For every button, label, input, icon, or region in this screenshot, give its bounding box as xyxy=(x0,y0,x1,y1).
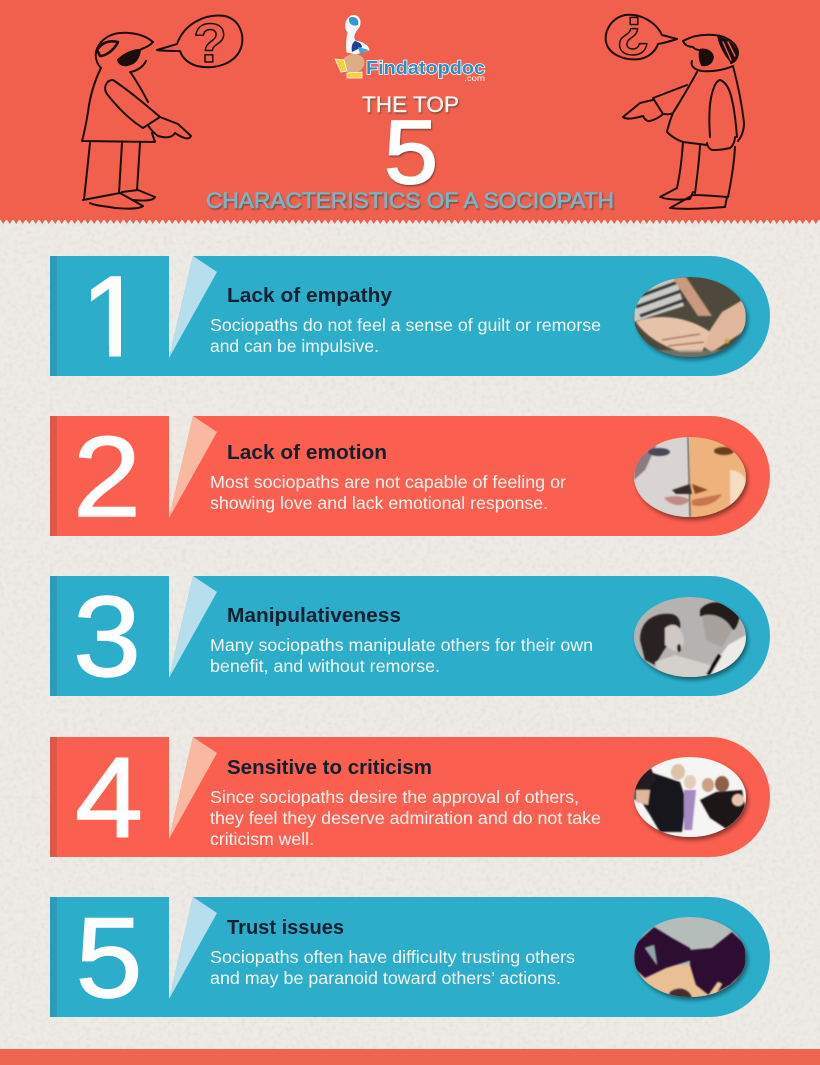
band shape xyxy=(50,737,770,857)
photo: group of people xyxy=(630,755,750,840)
logo wordmark: Findatopdoc xyxy=(366,58,485,78)
body text: showing love and lack emotional response. xyxy=(210,493,548,513)
body text: Sociopaths often have difficulty trusting others xyxy=(210,947,575,967)
band shape xyxy=(50,416,770,536)
body text xyxy=(210,947,575,988)
icon: duck mascot xyxy=(335,16,369,78)
illustration: right man with inverted question bubble xyxy=(606,0,744,209)
header banner xyxy=(0,0,820,224)
heading: Lack of emotion xyxy=(227,441,387,464)
heading: Sensitive to criticism xyxy=(227,756,432,779)
heading: Lack of empathy xyxy=(227,284,393,307)
title: characteristics: CHARACTERISTICS OF A SOCIOPATH xyxy=(206,188,614,213)
body text: Since sociopaths desire the approval of others, xyxy=(210,787,579,807)
body text: benefit, and without remorse. xyxy=(210,656,440,676)
panel: 2 lack of emotion xyxy=(50,414,770,541)
logo .com: .com xyxy=(464,74,485,83)
panel: 1 lack of empathy xyxy=(50,254,770,381)
band shape xyxy=(50,897,770,1017)
illustration: left man with question bubble xyxy=(82,12,242,209)
body text: they feel they deserve admiration and do not take xyxy=(210,808,601,828)
band shape xyxy=(50,576,770,696)
body text: Many sociopaths manipulate others for their own xyxy=(210,635,593,655)
body text xyxy=(210,787,601,849)
body text: Most sociopaths are not capable of feeling or xyxy=(210,472,566,492)
photo: hands xyxy=(630,275,750,360)
number 4: 4 xyxy=(75,735,143,862)
panel: 4 sensitive to criticism xyxy=(50,735,770,862)
number 5: 5 xyxy=(76,895,142,1022)
heading: Trust issues xyxy=(227,916,344,939)
panel: 5 trust issues xyxy=(50,895,770,1022)
body text xyxy=(210,635,593,676)
photo: arguing couple xyxy=(630,595,750,680)
number 2: 2 xyxy=(73,414,141,541)
heading: Manipulativeness xyxy=(227,604,401,627)
illustration: left man with question bubble: ? xyxy=(193,12,227,74)
body text xyxy=(210,315,601,356)
body text: criticism well. xyxy=(210,829,314,849)
body text: and may be paranoid toward others’ actions. xyxy=(210,968,561,988)
logo xyxy=(335,16,485,83)
title xyxy=(206,92,614,213)
body text xyxy=(210,472,566,513)
panel: 3 manipulativeness xyxy=(50,574,770,701)
title: big 5: 5 xyxy=(384,103,438,203)
footer bar xyxy=(0,1049,820,1065)
number 1 xyxy=(91,276,121,356)
photo: linked hands xyxy=(630,915,750,1000)
body text: and can be impulsive. xyxy=(210,336,379,356)
title: the top: THE TOP xyxy=(362,92,459,117)
number 3: 3 xyxy=(73,574,141,701)
number 1: 1 xyxy=(81,254,145,381)
photo: split face xyxy=(630,435,750,520)
band shape xyxy=(50,256,770,376)
body text: Sociopaths do not feel a sense of guilt or remorse xyxy=(210,315,601,335)
